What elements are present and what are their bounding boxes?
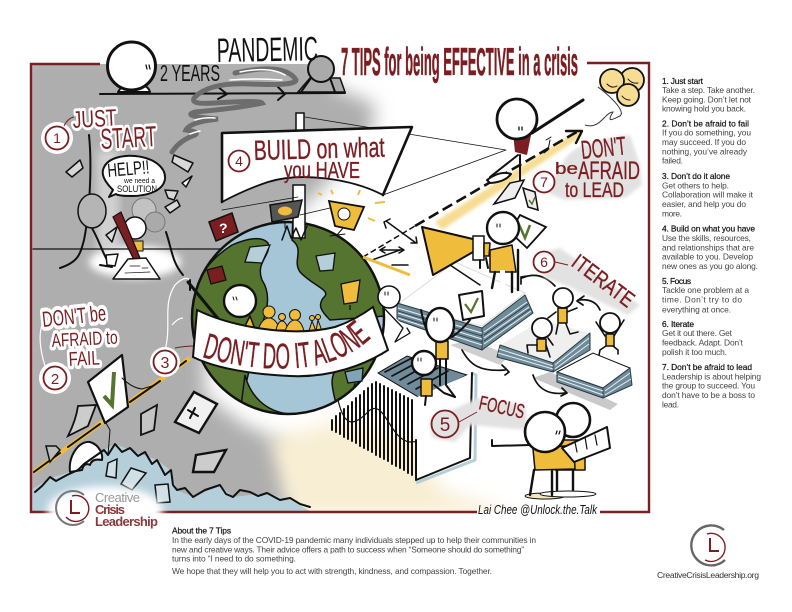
- banner 4: [222, 127, 412, 202]
- tip 2 text: [662, 118, 751, 166]
- tip 3 text: more.: [662, 208, 682, 218]
- failed papers: [46, 392, 226, 472]
- question card: ?: [219, 220, 228, 236]
- tip 2 heading: DON'T be: [41, 300, 107, 332]
- figures around the pencil: [60, 135, 183, 279]
- speech bubble: help: HELP!!: [107, 157, 150, 182]
- logo: creative crisis leadership: Crisis: [95, 502, 125, 517]
- resource monitors above globe: [209, 190, 385, 241]
- tip 7: don't be afraid to lead: to LEAD: [565, 179, 624, 202]
- tip 3 text: [662, 171, 754, 218]
- tip 5 heading: 5: [440, 415, 450, 436]
- label: 2 years: 2 YEARS: [160, 60, 220, 86]
- water waves: [35, 444, 310, 507]
- globe: [186, 220, 386, 416]
- tip 4: build on what you have: BUILD on what: [253, 132, 385, 166]
- tip 4: build on what you have: 4: [235, 153, 243, 169]
- tip 3 connector scribble and circle: [150, 278, 195, 377]
- tip 4: build on what you have: [222, 113, 506, 240]
- yellow beam: [363, 257, 410, 275]
- about the 7 tips: About the 7 Tips: [172, 526, 231, 536]
- tip 4 text: [662, 224, 758, 271]
- banner: don't do it alone: DON'T DO IT ALONE: [203, 320, 371, 370]
- tip 7: don't be afraid to lead: be: [555, 159, 578, 178]
- tip 1 heading: [41, 105, 157, 156]
- figure holding megaphone: [487, 212, 519, 292]
- tip 2 heading: FAIL: [68, 347, 100, 371]
- tip 2 heading: AFRAID to: [51, 328, 118, 352]
- tip 7 text: 7. Don’t be afraid to lead: [662, 362, 752, 372]
- crowd: [258, 306, 322, 331]
- vertical black lines: [332, 382, 412, 475]
- tip 7: don't be afraid to lead: DON'T: [579, 130, 627, 165]
- monitors on globe: [207, 245, 363, 390]
- tip 1 text: Take a step. Take another.: [662, 85, 755, 95]
- logo: creative crisis leadership: Leadership: [95, 514, 158, 529]
- tip 5 text: [662, 276, 749, 314]
- tips list: [662, 76, 761, 409]
- tip 2 heading: [39, 300, 118, 394]
- tip 3 text: Collaboration will make it: [662, 190, 754, 200]
- path line: yellow with black dashes: [34, 358, 190, 472]
- megaphone and figures: [363, 212, 640, 499]
- guy ropes: [222, 117, 506, 215]
- dashed path arrow with glow: [363, 130, 582, 257]
- tip 7 text: lead.: [662, 399, 679, 409]
- tip 6 text: feedback. Adapt. Don’t: [662, 337, 744, 347]
- figure with arms raised: [421, 291, 484, 397]
- tip 5 paper stack: [332, 356, 476, 483]
- tip 6 heading: ITERATE: [567, 249, 640, 312]
- scribble: [585, 87, 621, 126]
- tip 1 heading: START: [100, 121, 157, 156]
- yellow monitor: [329, 201, 364, 236]
- gray heading blob: [540, 135, 642, 200]
- paper: [113, 258, 160, 279]
- tip 1 text: [662, 76, 755, 114]
- tip 7: don't be afraid to lead: [363, 68, 644, 257]
- figure on globe edge with paper: [378, 286, 410, 342]
- tip 1 text: knowing hold you back.: [662, 104, 746, 114]
- continents: [193, 223, 383, 413]
- label: pandemic: PANDEMIC: [216, 30, 318, 70]
- background washes: [32, 64, 505, 512]
- tip 7 text: don’t have to be a boss to: [662, 390, 755, 400]
- logo: creative crisis leadership: [47, 486, 163, 534]
- tip 6 text: Get it out there. Get: [662, 328, 733, 338]
- tip 3 text: easier, and help you do: [662, 199, 746, 209]
- tip 6 text: polish it too much.: [662, 347, 727, 357]
- speech bubble: help: [103, 156, 165, 197]
- tip 5 heading: FOCUS: [477, 392, 527, 423]
- about the 7 tips: turns into “I need to do something.: [172, 554, 296, 564]
- tip 2 text: failed.: [662, 156, 683, 166]
- tip 3 text: 3. Don’t do it alone: [662, 171, 730, 181]
- white paper front: [416, 373, 472, 480]
- stack 1: large paper stack: [397, 262, 533, 365]
- tip 1 heading: JUST: [72, 105, 118, 134]
- stack 3: [533, 353, 632, 410]
- tip 7: don't be afraid to lead: AFRAID: [578, 157, 640, 185]
- tip 4 text: 4. Build on what you have: [662, 224, 755, 234]
- tip 1 heading: 1: [53, 130, 61, 146]
- ocean: [192, 222, 384, 414]
- tip 4: build on what you have: you HAVE: [284, 157, 360, 183]
- figure: big person: [108, 42, 156, 92]
- tip 6 heading: [534, 248, 640, 315]
- tip 1 text: Keep going. Don’t let not: [662, 94, 752, 104]
- tip 7 text: Leadership is about helping: [662, 371, 761, 381]
- tip 2 heading: 2: [51, 371, 59, 388]
- gray monitor: [270, 200, 302, 228]
- figure sitting on stack: [412, 351, 455, 405]
- horizon line: [33, 248, 222, 250]
- tornado: [172, 69, 296, 152]
- figure: gray person: [298, 56, 345, 92]
- about the 7 tips: In the early days of the COVID-19 pandemic many individuals stepped up to help their communities in: [172, 535, 536, 545]
- tip 6 heading: 6: [540, 254, 548, 270]
- tip 4 text: available to you. Develop: [662, 252, 753, 262]
- megaphone: [372, 227, 490, 285]
- papers with checks: [494, 180, 546, 248]
- tip 1 text: 1. Just start: [662, 76, 704, 86]
- tip 4 text: Use the skills, resources,: [662, 233, 751, 243]
- tip 3 text: Get others to help.: [662, 180, 729, 190]
- tip 3 connector scribble and circle: 3: [161, 355, 170, 372]
- tip 7 text: [662, 362, 761, 409]
- question card: [209, 213, 238, 241]
- about the 7 tips: We hope that they will help you to act with strength, kindness, and compassion. Together.: [172, 566, 492, 576]
- iterate figures: [527, 288, 624, 357]
- tip 2: don't be afraid to fail: [34, 300, 310, 507]
- tip 6 text: 6. Iterate: [662, 319, 694, 329]
- sinking papers: [106, 459, 170, 503]
- tip 5 text: Tackle one problem at a: [662, 285, 749, 295]
- two figures with paper: [492, 403, 610, 499]
- frame: [31, 63, 649, 512]
- paper with green check: [88, 355, 155, 455]
- tip 7: don't be afraid to lead: 7: [540, 174, 548, 190]
- about the 7 tips: new and creative ways. Their advice offers a path to success when “Someone should do something”: [172, 544, 524, 554]
- tip 5 heading: [430, 392, 528, 442]
- logo mark: [56, 491, 89, 525]
- tip 1: just start: [41, 105, 193, 279]
- stack top: [378, 356, 467, 398]
- tip 5 text: time. Don’t try to do: [662, 295, 742, 305]
- tip 2 text: 2. Don’t be afraid to fail: [662, 118, 749, 128]
- sign post: [293, 113, 305, 238]
- signature: Lai Chee @Unlock.the.Talk: [478, 502, 598, 517]
- tip 5 text: 5. Focus: [662, 276, 691, 286]
- website address: CreativeCrisisLeadership.org: [657, 570, 759, 580]
- leader figure: [487, 99, 583, 183]
- tip 7 text: the group to succeed. You: [662, 381, 755, 391]
- tip 2 text: may succeed. If you do: [662, 137, 746, 147]
- balls of success: [600, 68, 644, 106]
- scribble line: [338, 400, 432, 442]
- tip 6 text: [662, 319, 744, 357]
- figure drowning: [70, 442, 102, 472]
- logo wordmark: Creative: [95, 490, 140, 505]
- stack 2: [497, 320, 590, 372]
- cycle arrows: [462, 275, 600, 396]
- timeline: 2 years to pandemic: [100, 30, 345, 100]
- timeline arrow: [100, 87, 345, 100]
- speech bubble: help: SOLUTION: [117, 184, 157, 194]
- tip 2 text: nothing, you’ve already: [662, 146, 748, 156]
- speech bubble: help: we need a: [123, 178, 155, 185]
- icon: pencil: [113, 212, 140, 262]
- envelopes: [66, 155, 193, 266]
- tip 4 text: new ones as you go along.: [662, 261, 758, 271]
- tip 4 text: and relationships that are: [662, 242, 754, 252]
- website logo: [657, 525, 759, 580]
- about the 7 tips: [172, 526, 536, 576]
- tip 5 text: everything at once.: [662, 304, 731, 314]
- logo mark: [691, 525, 725, 565]
- double arrows: [380, 219, 417, 265]
- person on globe with pole: [188, 280, 256, 348]
- light rays: [318, 190, 385, 221]
- tip 2 text: If you do something, you: [662, 128, 751, 138]
